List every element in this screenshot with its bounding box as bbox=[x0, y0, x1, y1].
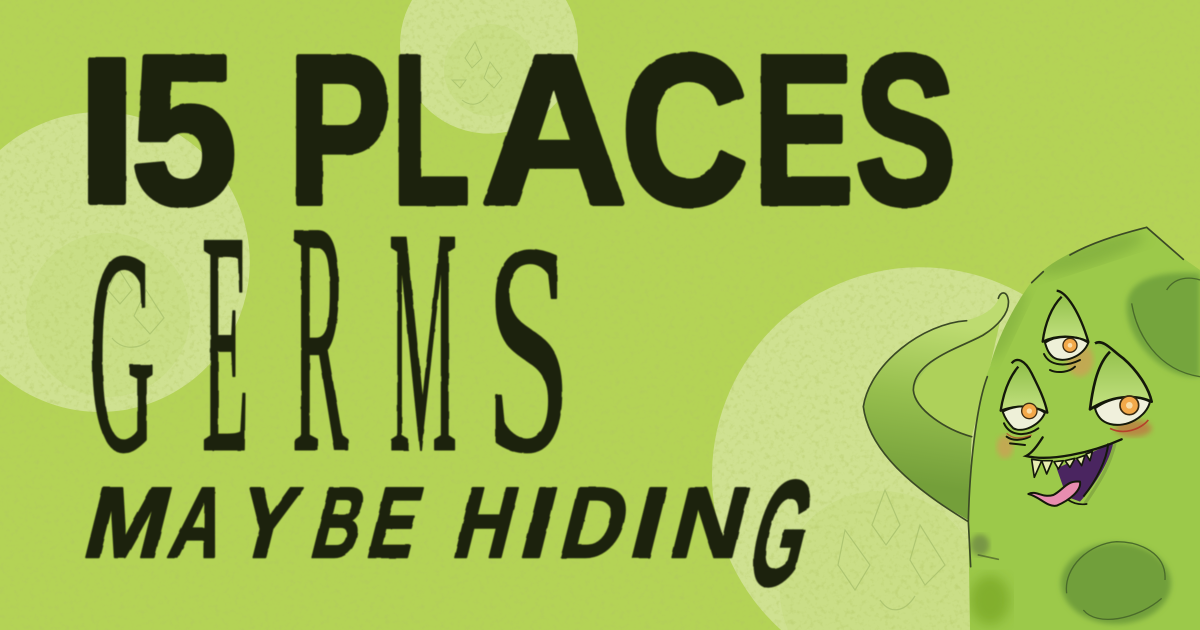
spot: lower bbox=[1061, 542, 1171, 624]
title line: MAY BE HIDING: A bbox=[161, 466, 239, 579]
title line: 15 PLACES bbox=[87, 50, 954, 210]
body outline bbox=[968, 227, 1183, 567]
monster germ character bbox=[863, 224, 1200, 630]
pale germ circle: top bbox=[400, 0, 578, 134]
title line: MAY BE HIDING: N bbox=[661, 466, 761, 579]
title line: MAY BE HIDING bbox=[75, 450, 829, 617]
mouth bbox=[1026, 437, 1122, 506]
eye: right bbox=[1090, 342, 1152, 437]
title line: GERMS: G bbox=[89, 191, 155, 512]
body bbox=[968, 227, 1200, 630]
title line: 15 PLACES: 5 bbox=[131, 11, 237, 248]
body shading bbox=[970, 224, 1148, 625]
title line: 15 PLACES: E bbox=[753, 11, 854, 248]
title line: 15 PLACES: A bbox=[481, 11, 627, 248]
arm pocket bbox=[913, 307, 1003, 437]
title line: GERMS: S bbox=[486, 182, 571, 514]
pale germ circle: lower right bbox=[712, 267, 1128, 630]
title line: MAY BE HIDING: I bbox=[621, 466, 679, 579]
title line: MAY BE HIDING: M bbox=[75, 466, 183, 579]
title line: 15 PLACES: 1 bbox=[17, 11, 167, 248]
eye: top bbox=[1043, 291, 1093, 377]
teeth bbox=[1032, 452, 1092, 477]
title line: MAY BE HIDING: B bbox=[303, 466, 377, 579]
title line: GERMS: M bbox=[389, 162, 457, 519]
title line: MAY BE HIDING: H bbox=[445, 466, 529, 579]
title line: 15 PLACES: S bbox=[855, 11, 956, 248]
eye: left bbox=[997, 360, 1047, 458]
title line: MAY BE HIDING: I bbox=[511, 466, 569, 579]
title line: GERMS bbox=[89, 153, 571, 521]
title line: 15 PLACES: C bbox=[621, 11, 748, 248]
title line: MAY BE HIDING: Y bbox=[227, 466, 310, 579]
title line: 15 PLACES: P bbox=[288, 11, 391, 248]
arm outline bbox=[863, 293, 1008, 522]
title line: GERMS: R bbox=[292, 153, 348, 521]
title line: MAY BE HIDING: E bbox=[359, 466, 433, 579]
title line: MAY BE HIDING: D bbox=[551, 466, 641, 579]
title line: GERMS: E bbox=[202, 167, 249, 518]
raised arm bbox=[863, 292, 1008, 520]
title line: MAY BE HIDING: G bbox=[735, 450, 829, 617]
title line: 15 PLACES: L bbox=[392, 11, 470, 248]
pale germ circle: left bbox=[0, 112, 250, 412]
spot: upper right bbox=[1127, 273, 1200, 377]
tongue bbox=[1028, 481, 1080, 506]
